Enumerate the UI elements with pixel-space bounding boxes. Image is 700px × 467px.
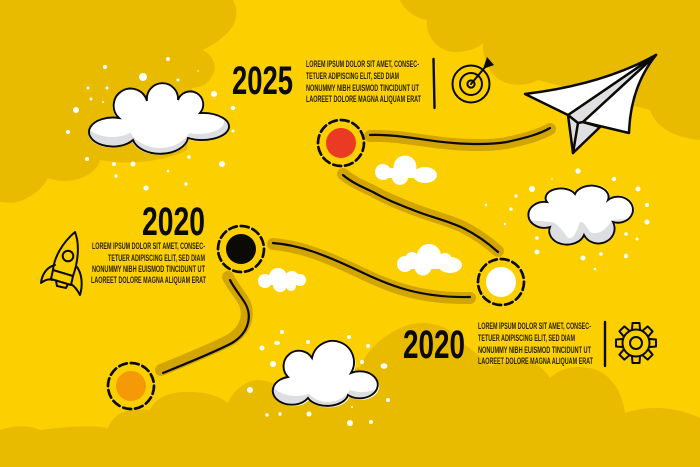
text block: 2020 right: LAOREET DOLORE MAGNA ALIQUAM ERAT <box>478 356 593 367</box>
cloud: top left <box>88 82 230 155</box>
heading: 2020 left: 2020 <box>142 200 205 244</box>
small white cloud: upper centre <box>375 156 437 185</box>
text block: 2020 right: TETUER ADIPISCING ELIT, SED DIAM <box>478 333 575 344</box>
sparkle dots: bottom cloud <box>247 330 390 426</box>
text block: 2020 left: LAOREET DOLORE MAGNA ALIQUAM ERAT <box>91 275 206 286</box>
text block: 2025: LOREM IPSUM DOLOR SIT AMET, CONSEC- <box>306 59 419 70</box>
text block: 2020 left <box>91 241 206 286</box>
text block: 2020 left: TETUER ADIPISCING ELIT, SED DIAM <box>108 253 205 264</box>
route path: black to white <box>273 243 470 298</box>
milestone: black <box>218 226 264 272</box>
small white cloud: middle <box>397 244 462 276</box>
sparkle dots: right cloud <box>485 168 650 270</box>
milestone: orange <box>108 363 154 409</box>
heading: 2020 right: 2020 <box>403 323 465 367</box>
text block: 2020 left: LOREM IPSUM DOLOR SIT AMET, CONSEC- <box>92 241 205 252</box>
text block: 2020 right: NONUMMY NIBH EUISMOD TINCIDUNT UT <box>478 345 591 356</box>
route path: white to red <box>343 174 498 252</box>
icon: target <box>452 57 494 102</box>
route path: orange to black <box>161 277 249 373</box>
background cloud: bottom <box>0 323 700 467</box>
icon: rocket <box>41 232 82 295</box>
route path: red to plane <box>370 128 550 145</box>
divider: 2025 <box>434 59 435 108</box>
milestone: red <box>318 120 364 166</box>
sparkle dots: top left cloud <box>66 57 235 191</box>
icon: gear <box>616 323 656 363</box>
text block: 2025 <box>306 59 421 105</box>
milestone: white <box>478 259 524 305</box>
small white cloud: lower left <box>258 268 306 292</box>
background cloud: top left <box>0 0 236 203</box>
divider: 2020 right <box>604 322 606 366</box>
heading: 2025: 2025 <box>232 59 293 103</box>
text block: 2025: LAOREET DOLORE MAGNA ALIQUAM ERAT <box>306 94 421 105</box>
text block: 2025: NONUMMY NIBH EUISMOD TINCIDUNT UT <box>306 83 419 94</box>
text block: 2020 right <box>478 321 593 367</box>
cloud: bottom <box>272 340 380 408</box>
paper plane <box>525 55 656 153</box>
text block: 2020 left: NONUMMY NIBH EUISMOD TINCIDUNT UT <box>92 264 205 275</box>
background cloud: top right <box>400 0 700 140</box>
cloud: right <box>527 184 634 246</box>
text block: 2025: TETUER ADIPISCING ELIT, SED DIAM <box>306 71 399 82</box>
text block: 2020 right: LOREM IPSUM DOLOR SIT AMET, CONSEC- <box>478 321 591 332</box>
